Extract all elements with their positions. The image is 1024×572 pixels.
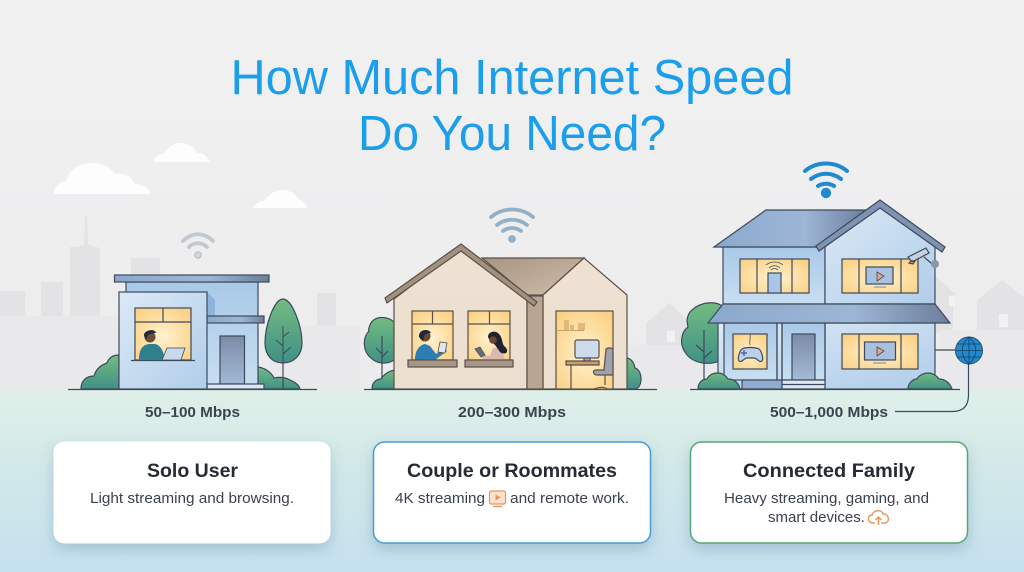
card: connected family <box>690 442 968 543</box>
icon: video play <box>490 491 506 506</box>
upper-right window with TV <box>842 259 918 293</box>
ground band <box>0 389 1024 572</box>
column <box>527 296 543 389</box>
back roof <box>482 258 584 295</box>
upper walls <box>723 247 825 304</box>
game window with controller <box>733 334 767 369</box>
right wing wall <box>543 258 627 389</box>
title: Do You Need? <box>358 107 666 161</box>
door and steps <box>792 334 815 380</box>
card text: 4K streaming <box>395 490 485 507</box>
card text: and remote work. <box>510 490 629 507</box>
lower-right window with TV <box>842 334 918 369</box>
house: connected family <box>682 200 952 389</box>
card title: Couple or Roommates <box>407 460 617 482</box>
card: solo user <box>54 442 330 544</box>
house body <box>126 282 258 389</box>
upper-left window with router <box>740 259 809 293</box>
window with person and laptop <box>131 308 195 360</box>
card text <box>395 490 629 507</box>
title: How Much Internet Speed <box>230 51 794 105</box>
icon: cloud upload <box>868 511 888 525</box>
speed labels <box>145 404 888 421</box>
neighbourhood silhouettes right <box>620 276 1024 389</box>
main roof <box>714 210 866 247</box>
bushes and tree <box>364 317 641 389</box>
security camera <box>908 248 939 268</box>
card: couple or roommates <box>374 442 650 543</box>
left wall <box>394 248 527 389</box>
card text: Heavy streaming, gaming, and <box>724 490 929 507</box>
speed labels: 500–1,000 Mbps <box>770 404 888 421</box>
skyline left <box>0 215 360 390</box>
bushes <box>81 355 300 389</box>
porch roof <box>708 304 950 323</box>
speed labels: 200–300 Mbps <box>458 404 566 421</box>
right gable roof <box>816 200 945 252</box>
lower walls <box>718 323 935 389</box>
card text: smart devices. <box>768 509 865 526</box>
window left with person <box>408 311 457 367</box>
card title: Connected Family <box>743 460 915 482</box>
wifi icon: strong <box>805 164 847 196</box>
tree <box>682 303 722 389</box>
globe with connector <box>895 337 982 412</box>
background sky <box>0 0 1024 390</box>
clouds <box>54 143 307 208</box>
house: couple or roommates <box>364 244 641 389</box>
wifi icon: medium <box>491 210 533 242</box>
ground line <box>68 388 960 390</box>
title <box>230 51 794 161</box>
bushes <box>698 373 952 389</box>
card text: Light streaming and browsing. <box>90 490 294 507</box>
card title: Solo User <box>147 460 238 482</box>
house: solo user <box>81 275 302 389</box>
left gable roof <box>385 244 537 306</box>
wifi icon: faint <box>183 234 213 258</box>
office window with desk, monitor and chair <box>556 311 613 389</box>
card text <box>724 490 929 526</box>
tree <box>265 299 302 389</box>
window right with person <box>465 311 513 367</box>
speed labels: 50–100 Mbps <box>145 404 240 421</box>
